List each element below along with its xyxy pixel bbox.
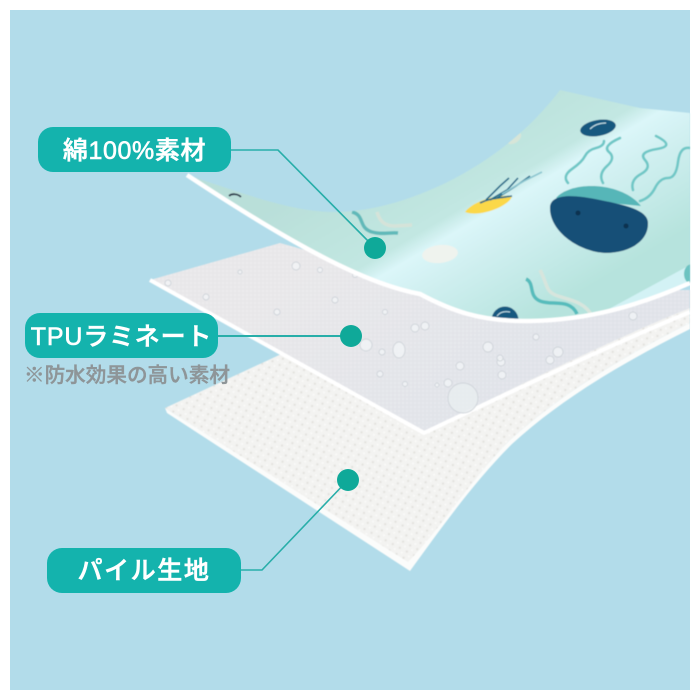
- callout: TPU label: TPUラミネート: [31, 323, 212, 351]
- icon: large jellyfish: [550, 136, 690, 253]
- icon: bubble top: [580, 119, 616, 137]
- callout: pile label: パイル生地: [77, 557, 211, 585]
- pale corner: [611, 268, 687, 308]
- fabric layers: [150, 90, 700, 571]
- water droplets: [165, 262, 637, 413]
- callout: TPU label: [25, 313, 218, 358]
- pale smudge: [508, 133, 522, 144]
- wave: pale upper: [377, 212, 412, 226]
- note: waterproof material: ※防水効果の高い素材: [24, 364, 230, 387]
- icon: small yellow jellyfish: [465, 172, 542, 214]
- callout: cotton label: [38, 127, 231, 172]
- callout: pile leader and dot: [241, 469, 359, 570]
- callout: cotton label: 綿100%素材: [63, 137, 206, 165]
- callout: pile label: [47, 548, 241, 593]
- wave: pale lower: [540, 270, 592, 316]
- callout: TPU leader and dot: [218, 325, 362, 347]
- teal blob right edge: [684, 264, 691, 283]
- layer: cotton printed fabric: [187, 90, 700, 334]
- wave: upper: [352, 212, 398, 233]
- icon: pale pebble: [422, 244, 458, 264]
- callout: cotton leader and dot: [231, 150, 386, 259]
- wave: lower: [526, 279, 577, 314]
- layer: TPU laminate: [150, 243, 690, 433]
- edge marks: [228, 192, 242, 198]
- layer: pile fabric: [165, 300, 690, 571]
- icon: bubble bottom: [492, 306, 519, 320]
- white edge of top layer: [187, 175, 690, 321]
